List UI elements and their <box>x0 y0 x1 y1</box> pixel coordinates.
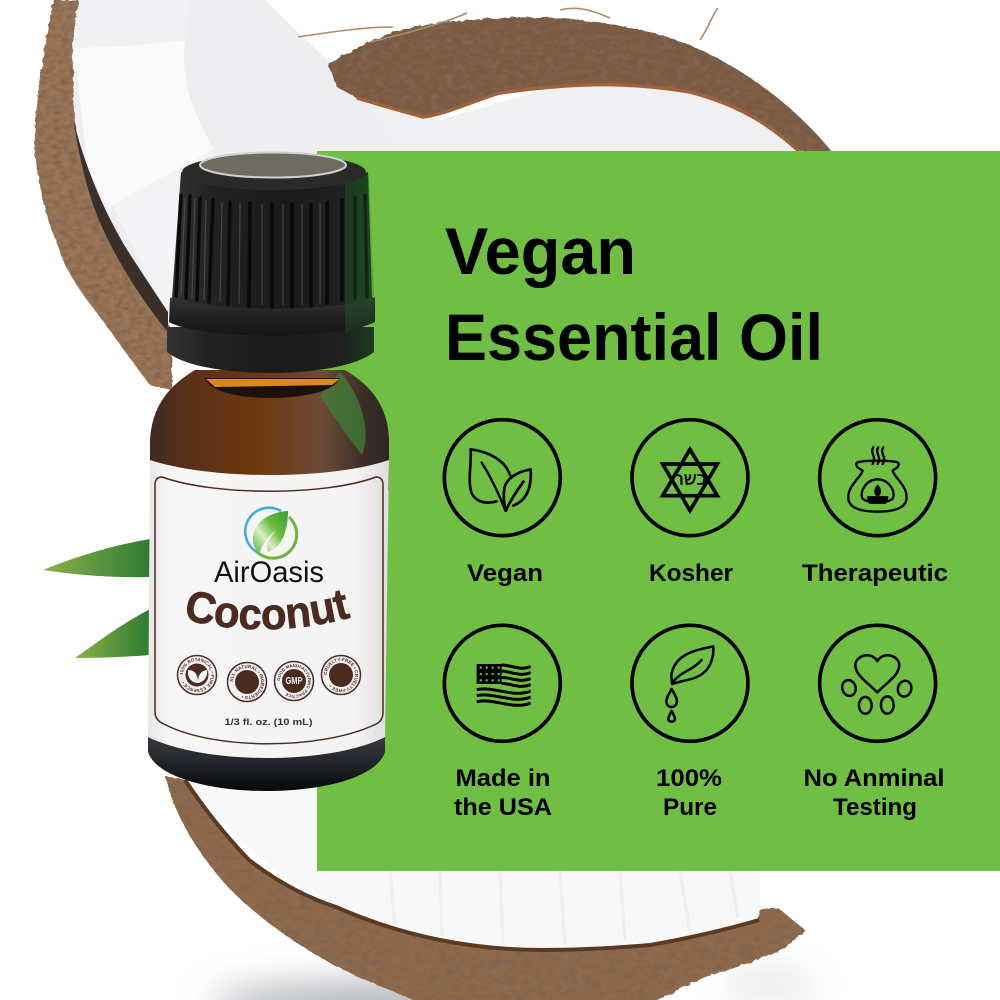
net volume: 1/3 fl. oz. (10 mL) <box>224 717 312 728</box>
label: No Anminal Testing: Testing <box>833 794 917 821</box>
badge: botanical: 100% BOTANICAL • PURE ESSENCE • <box>180 658 214 692</box>
badge: all natural: ALL NATURAL • INGREDIENTS • <box>230 664 264 700</box>
heading: Essential Oil <box>445 300 823 374</box>
badge: cruelty free: CRUELTY-FREE • CRUELTY-FREE • <box>324 658 358 692</box>
label: No Anminal Testing: No Anminal <box>804 765 944 792</box>
label: Vegan: Vegan <box>467 560 543 587</box>
icon: paw with heart <box>820 625 936 741</box>
label: 100% Pure: 100% <box>656 765 722 792</box>
palm leaf upper <box>43 539 150 577</box>
green panel <box>317 151 1000 871</box>
product name: Coconut <box>186 590 351 630</box>
label: Made in the USA <box>454 765 552 821</box>
heading: Vegan <box>445 214 636 288</box>
ground shadow <box>210 971 820 1000</box>
bottle base <box>148 735 385 791</box>
icon: aroma burner <box>820 420 936 536</box>
coconut: dark husk rim <box>185 780 759 950</box>
logo leaf <box>253 511 288 553</box>
label: 100% Pure <box>656 765 722 821</box>
cap top disc <box>200 152 346 178</box>
icon: pure leaf with drops <box>632 625 748 741</box>
cap ribs <box>176 195 367 307</box>
label: Made in the USA: the USA <box>454 794 552 821</box>
coconut: flesh fibre shading <box>390 871 738 945</box>
badge: GMP: GOOD MANUFACTURING PRACTICE <box>277 664 311 698</box>
logo ring green <box>257 517 297 558</box>
coconut: top-right husk lower rim <box>357 85 800 152</box>
coconut: bottom flesh <box>185 770 760 952</box>
coconut: top-right flesh <box>355 85 800 155</box>
icon: vegan leaves <box>444 420 560 536</box>
cap ring <box>167 327 374 373</box>
heading <box>445 214 823 374</box>
icon: kosher star <box>632 420 748 536</box>
coconut: bottom husk <box>165 776 805 1000</box>
coconut: top fibres <box>298 8 718 42</box>
coconut: top-left husk <box>35 0 172 390</box>
white label <box>148 460 389 758</box>
logo wordmark: AirOasis <box>214 556 324 589</box>
label: 100% Pure: Pure <box>663 794 717 821</box>
amber liquid glint <box>206 379 340 387</box>
logo ring blue <box>245 508 281 552</box>
cap top plate <box>182 154 366 190</box>
icon: kosher star: כשר <box>674 469 706 490</box>
coconut: dark inner rim <box>73 118 168 332</box>
cap collar <box>169 292 375 336</box>
label: Kosher: Kosher <box>649 560 733 587</box>
icon: US flag <box>444 625 560 741</box>
cap body <box>172 172 372 308</box>
cap green reflection <box>345 175 375 332</box>
label: Made in the USA: Made in <box>456 765 550 792</box>
label: No Anminal Testing <box>804 765 944 821</box>
coconut: top-left flesh <box>74 0 445 320</box>
label: Therapeutic: Therapeutic <box>802 560 948 587</box>
bottle glass <box>150 370 389 490</box>
amber neck <box>205 378 340 398</box>
coconut: top-right husk <box>328 17 832 152</box>
cap rib highlights <box>181 198 320 305</box>
palm leaf lower <box>75 609 150 658</box>
badge: GMP: GMP <box>286 676 303 687</box>
glass reflection <box>320 372 366 455</box>
label border <box>155 477 383 744</box>
product bottle <box>148 152 389 791</box>
